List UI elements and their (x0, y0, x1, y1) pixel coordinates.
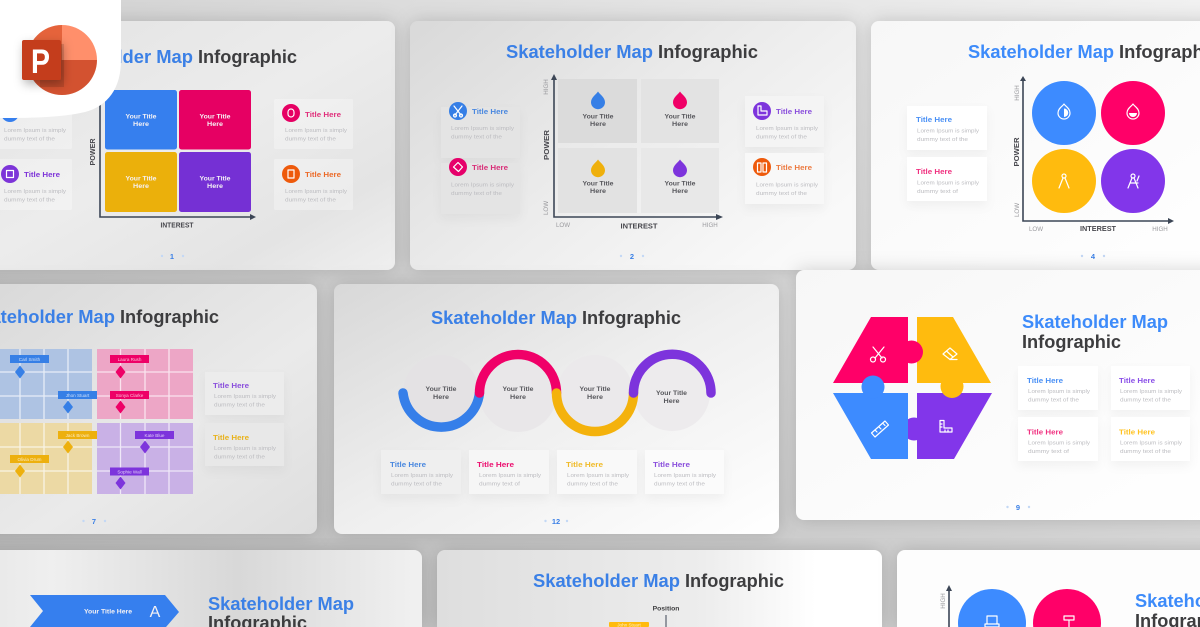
info box 3: dummy text of the (567, 482, 619, 488)
circle: purple (1101, 149, 1165, 213)
step labels: Your Title (426, 386, 457, 393)
axis labels: LOW (556, 222, 570, 229)
grid: blue quadrant: Jhon Stuart (66, 393, 90, 398)
page number (82, 517, 106, 526)
circle: yellow (1032, 149, 1096, 213)
info box 4: Title Here (653, 460, 690, 469)
slide 12 heading: Infographic (582, 307, 681, 328)
quadrant: bottom right (641, 148, 719, 213)
step labels: Here (433, 394, 449, 401)
info box 2: Lorem Ipsum is simply (479, 473, 541, 479)
info box: top right: dummy text of the (1120, 398, 1172, 404)
quadrant: yellow: Your Title (126, 176, 157, 182)
info box: bottom right: Title Here (1119, 428, 1155, 436)
axis labels: HIGH (1152, 226, 1168, 233)
info box: right top: Title Here (776, 107, 812, 116)
heading: Skateholder Map (208, 593, 354, 614)
axis label: interest: INTEREST (160, 222, 194, 230)
info box: right bottom: dummy text of the (285, 198, 337, 204)
grid: purple quadrant (97, 423, 193, 494)
name tag (609, 622, 649, 627)
info box 1 (381, 450, 461, 494)
puzzle piece: purple (902, 393, 992, 459)
info box: left bottom: Lorem Ipsum is simply (917, 180, 979, 186)
info box: left top: Title Here (472, 107, 508, 116)
info box: left bottom: Title Here (24, 170, 60, 179)
slide 12 heading (431, 307, 681, 328)
info box: bottom left: Title Here (1027, 428, 1063, 436)
grid: blue quadrant (0, 349, 97, 419)
info box: left top: dummy text of the (4, 136, 56, 142)
puzzle knob: yellow (940, 375, 964, 398)
axis labels: LOW (1014, 203, 1021, 217)
grid: blue quadrant: Carl Smith (19, 357, 41, 362)
axis: HIGH (940, 593, 947, 609)
info box: right top (274, 99, 353, 149)
info box: right top: Lorem Ipsum is simply (285, 128, 347, 134)
quadrant: bottom left: Here (590, 188, 606, 195)
info box: bottom: Title Here (213, 433, 249, 442)
info box: top right: Title Here (1119, 376, 1155, 385)
page number: 4 (1091, 252, 1096, 261)
info box: top: dummy text of the (214, 402, 266, 408)
axis labels: HIGH (543, 79, 550, 95)
page number (1006, 503, 1030, 512)
step circles (403, 354, 710, 432)
info box: left top: Title Here (916, 115, 952, 124)
info box: bottom right: dummy text of the (1120, 449, 1172, 455)
info box: left top: Lorem Ipsum is simply (917, 128, 979, 134)
info box: right top: Lorem Ipsum is simply (756, 126, 818, 132)
panel: slide 12 (334, 284, 779, 534)
ribbon arrow (30, 595, 179, 627)
slide 4 heading: Skateholder Map (968, 41, 1114, 62)
quadrant: top left: Here (590, 121, 606, 128)
quadrant: bottom right: Your Title (664, 180, 696, 188)
info box: left bottom: dummy text of the (4, 198, 56, 204)
info box: top right (1111, 366, 1190, 410)
info box: right top: dummy text of the (756, 134, 808, 140)
quadrant: top right: Here (672, 121, 688, 128)
info box: left bottom: dummy text of the (451, 191, 503, 197)
panel: slide 9 (796, 270, 1200, 520)
heading: Infographic (685, 570, 784, 591)
slide 4 heading (968, 41, 1200, 62)
panel: slide bottom right (897, 550, 1200, 627)
quadrant: yellow (105, 152, 177, 212)
ribbon arrow: A (150, 604, 161, 621)
step labels: Your Title (580, 386, 611, 393)
icon: scissors (870, 347, 886, 362)
quadrant: yellow: Here (133, 183, 149, 190)
info box 4: Lorem Ipsum is simply (654, 473, 716, 479)
quadrant: bottom right: Here (672, 188, 688, 195)
page number: 7 (92, 517, 96, 526)
slide 7 heading (0, 306, 219, 327)
circle: blue (958, 589, 1026, 627)
grid: yellow quadrant (0, 423, 97, 494)
icon: PowerPoint logo: P (31, 43, 50, 81)
axis labels: INTEREST (1080, 226, 1117, 233)
axis labels: LOW (1029, 226, 1043, 233)
white corner badge (0, 0, 121, 118)
slide 1 heading dark part: Infographic (198, 46, 297, 67)
panel: slide 2 (410, 21, 856, 270)
axis labels (1014, 85, 1168, 233)
page number: 12 (552, 517, 560, 526)
panel: slide 7 (0, 284, 317, 534)
info box: right bottom (274, 159, 353, 210)
circle: blue (1032, 81, 1096, 145)
info box: left top: dummy text of the (451, 134, 503, 140)
axis (940, 585, 952, 627)
info box 4: dummy text of the (654, 482, 706, 488)
puzzle hexagon (833, 317, 992, 459)
puzzle piece: yellow (917, 317, 991, 383)
page number (544, 517, 568, 526)
slide 2 heading: Skateholder Map (506, 41, 653, 62)
quadrant: blue (105, 90, 177, 150)
info box 1: Title Here (390, 460, 426, 469)
info box: left bottom: Lorem Ipsum is simply (451, 182, 514, 188)
page number (161, 252, 184, 261)
position label and axis (653, 606, 679, 627)
slide 2 heading: Infographic (658, 41, 758, 62)
info box: left bottom (907, 157, 987, 201)
position label and axis: Position (653, 606, 679, 612)
quadrant: bottom left: Your Title (582, 180, 614, 188)
info box 2: Title Here (477, 460, 514, 469)
grid: yellow quadrant: Olivia Drum (18, 457, 42, 462)
puzzle piece: blue (833, 376, 908, 459)
page number: 1 (170, 252, 174, 261)
info box 1: Lorem Ipsum is simply (391, 473, 453, 479)
info box: bottom left: Lorem Ipsum is simply (1028, 440, 1090, 446)
axis labels: LOW (543, 201, 550, 215)
quadrant: top right: Your Title (664, 114, 696, 120)
info box: left bottom: Lorem Ipsum is simply (4, 189, 66, 195)
grid: purple quadrant: Sophie Wall (117, 470, 142, 474)
axis labels (543, 79, 718, 230)
panel: slide 1 (0, 21, 395, 270)
info box: left top: Lorem Ipsum is simply (451, 126, 514, 132)
step labels: Your Title (502, 386, 534, 393)
axes (1020, 76, 1174, 224)
info box 3: Title Here (566, 460, 603, 469)
info box: bottom right (1111, 417, 1190, 461)
puzzle piece: pink (833, 317, 923, 383)
grid: yellow quadrant: Jack Brown (66, 433, 90, 438)
info box: right bottom: Title Here (305, 170, 341, 179)
wave arcs (403, 354, 711, 432)
info box: left bottom: dummy text of (917, 189, 958, 195)
quadrant: pink: Your Title (200, 114, 231, 120)
info box: left top: Lorem Ipsum is simply (4, 128, 66, 134)
info box 2 (469, 450, 549, 494)
step labels: Your Title (656, 390, 687, 397)
info box: top right: Lorem Ipsum is simply (1120, 389, 1182, 395)
quadrant: blue: Here (133, 121, 149, 128)
axis labels: INTEREST (620, 224, 658, 230)
info box: right bottom: Lorem Ipsum is simply (756, 182, 818, 188)
info box: right bottom: Title Here (776, 163, 812, 172)
quadrant: purple: Here (207, 183, 223, 190)
slide 7 heading: Infographic (120, 306, 219, 327)
icon: ruler (872, 421, 888, 437)
info box: top: Title Here (213, 381, 249, 390)
info box 2: dummy text of (479, 482, 520, 488)
info box: right top (745, 96, 824, 147)
circle: pink (1101, 81, 1165, 145)
page number: 2 (630, 252, 634, 261)
quadrant: top left: Your Title (582, 114, 614, 120)
info box: right bottom: Lorem Ipsum is simply (285, 189, 347, 195)
grid: pink quadrant (97, 349, 193, 419)
quadrant: blue: Your Title (126, 114, 157, 120)
info box 1: dummy text of the (391, 482, 443, 488)
icon: L ruler (940, 420, 952, 432)
info box: right top: Title Here (305, 110, 341, 119)
heading (533, 570, 784, 591)
info box: bottom: dummy text of the (214, 454, 266, 460)
icon: eraser (943, 348, 957, 360)
axes (100, 100, 256, 220)
step labels: Here (587, 394, 603, 401)
slide 9 heading: Skateholder Map (1022, 311, 1168, 332)
slide 9 heading (1022, 311, 1168, 352)
info box: bottom left (1018, 417, 1098, 461)
slide 1 heading: Skateholder Map (46, 46, 193, 67)
grid: pink quadrant: Laura Rush (118, 357, 142, 362)
step labels: Here (510, 394, 526, 401)
quadrant: purple: Your Title (200, 176, 231, 182)
info box: left bottom: Title Here (916, 167, 952, 176)
grid: pink quadrant: Sonya Clarke (116, 393, 144, 398)
quadrant: pink (179, 90, 251, 150)
quadrant: bottom left (558, 148, 637, 213)
ribbon arrow: Your Title Here (84, 608, 132, 616)
info box: right top: dummy text of the (285, 136, 337, 142)
info box: left bottom: Title Here (472, 163, 508, 172)
info box 3 (557, 450, 637, 494)
info box: bottom (205, 423, 284, 466)
slide 2 heading (506, 41, 758, 62)
info box: right bottom (745, 153, 824, 204)
panel: slide bottom centre (437, 550, 882, 627)
info box: left top (441, 102, 520, 158)
axis labels: HIGH (702, 222, 718, 229)
info box: top left (1018, 366, 1098, 410)
page number (620, 252, 644, 261)
heading (208, 593, 354, 627)
quadrant: purple (179, 152, 251, 212)
step labels: Here (664, 398, 680, 405)
axis labels: POWER (544, 130, 551, 160)
page number: 9 (1016, 503, 1020, 512)
info box: bottom right: Lorem Ipsum is simply (1120, 440, 1182, 446)
grid: purple quadrant: Kate Blue (145, 433, 165, 438)
heading: Skateholder Map (533, 570, 680, 591)
info box: left top (0, 99, 72, 149)
info box: top left: dummy text of the (1028, 398, 1080, 404)
panel: slide bottom left (0, 550, 422, 627)
info box: top left: Lorem Ipsum is simply (1028, 389, 1090, 395)
slide 12 heading: Skateholder Map (431, 307, 577, 328)
info box: top left: Title Here (1027, 376, 1063, 385)
info box: bottom: Lorem Ipsum is simply (214, 446, 276, 452)
panel: slide 4 (871, 21, 1200, 270)
info box: left bottom (0, 159, 72, 210)
circle: pink (1033, 589, 1101, 627)
page number (1081, 252, 1105, 261)
info box 4 (645, 450, 724, 494)
info box: left top: dummy text of the (917, 137, 969, 143)
slide 9 heading: Infographic (1022, 331, 1121, 352)
info box: bottom left: dummy text of (1028, 449, 1069, 455)
axis labels: POWER (1014, 138, 1021, 166)
info box: left bottom (441, 158, 520, 214)
quadrant: top left (558, 79, 637, 143)
axis labels: HIGH (1014, 85, 1021, 101)
info box: right bottom: dummy text of the (756, 191, 808, 197)
axes (551, 74, 723, 220)
axis label: power: POWER (90, 138, 97, 166)
info box 3: Lorem Ipsum is simply (567, 473, 629, 479)
quadrant: pink: Here (207, 121, 223, 128)
step labels (426, 386, 687, 405)
quadrant: top right (641, 79, 719, 143)
info box: left top (907, 106, 987, 150)
info box: top: Lorem Ipsum is simply (214, 394, 276, 400)
heading (1135, 590, 1200, 627)
info box: top (205, 372, 284, 415)
